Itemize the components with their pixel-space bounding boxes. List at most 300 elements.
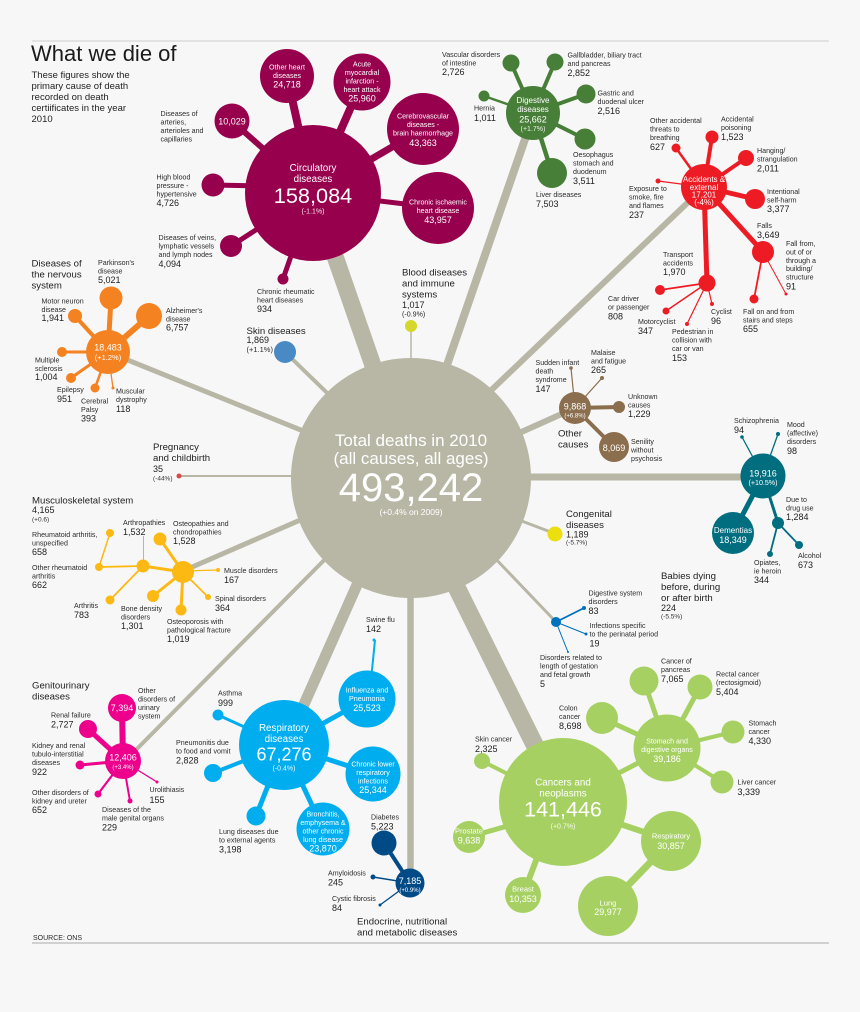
kidney and renal: 922 bbox=[32, 767, 47, 777]
hub: genitourinary total bbox=[105, 743, 141, 779]
skin diseases bbox=[246, 326, 306, 363]
skin diseases: (+1.1%) bbox=[246, 345, 273, 354]
musculoskeletal heading bbox=[32, 496, 133, 524]
blood diseases and immune systems: 1,017 bbox=[402, 300, 425, 310]
hub: respiratory total bbox=[239, 700, 329, 790]
hub: accidents total: (-4%) bbox=[694, 198, 714, 207]
high blood pressure: 4,726 bbox=[156, 198, 179, 208]
skin cancer: 2,325 bbox=[475, 744, 498, 754]
amyloidosis bbox=[328, 870, 410, 888]
acute myocardial infarction: heart attack bbox=[343, 86, 381, 94]
source: SOURCE: ONS bbox=[33, 935, 82, 942]
unknown causes: causes bbox=[628, 402, 651, 410]
transport accidents: accidents bbox=[663, 260, 693, 268]
osteopathies bbox=[154, 520, 229, 572]
pregnancy and childbirth: (-44%) bbox=[153, 476, 173, 482]
diseases of veins: 4,094 bbox=[158, 259, 181, 269]
vascular disorders of intestine: Vascular disorders bbox=[442, 51, 501, 59]
intentional self-harm: 3,377 bbox=[767, 204, 790, 214]
cerebral palsy: Cerebral bbox=[81, 398, 109, 406]
hanging: strangulation bbox=[757, 156, 798, 164]
digestive system disorders: disorders bbox=[588, 598, 618, 606]
stomach and digestive organs: 3,339 bbox=[738, 787, 760, 797]
congenital diseases bbox=[548, 509, 612, 546]
falls: out of or bbox=[786, 248, 813, 256]
muscular dystrophy: dystrophy bbox=[116, 396, 147, 404]
hub: nervous total: 18,483 bbox=[94, 342, 122, 352]
skin diseases: Skin diseases bbox=[246, 326, 306, 337]
prostate cancer: Prostate bbox=[455, 826, 483, 836]
transport accidents: 347 bbox=[638, 326, 653, 336]
intentional self-harm: self-harm bbox=[767, 196, 797, 204]
influenza and pneumonia: Swine flu bbox=[366, 616, 395, 624]
unknown causes bbox=[575, 393, 658, 419]
due to drug use: Due to bbox=[786, 496, 807, 504]
cerebrovascular diseases bbox=[313, 93, 459, 193]
intro text: recorded on death bbox=[32, 92, 109, 103]
arthropathies bbox=[123, 519, 183, 572]
acute myocardial infarction: 25,960 bbox=[348, 94, 376, 104]
stomach and digestive organs: Cancer of bbox=[661, 658, 692, 666]
hub: respiratory total: 67,276 bbox=[256, 744, 312, 764]
renal failure: Renal failure bbox=[51, 712, 91, 720]
vascular disorders of intestine: 2,726 bbox=[442, 67, 465, 77]
gastric ulcer: Gastric and bbox=[598, 90, 634, 98]
bronchitis and emphysema bbox=[284, 745, 350, 856]
accidental poisoning bbox=[704, 116, 754, 187]
hub: respiratory total: Respiratory bbox=[259, 723, 309, 734]
transport accidents: 153 bbox=[672, 353, 687, 363]
oesophagus: 3,511 bbox=[573, 176, 595, 186]
chronic rheumatic heart diseases: Chronic rheumatic bbox=[257, 288, 315, 296]
arthritis bbox=[74, 566, 143, 620]
digestive system disorders bbox=[556, 590, 642, 622]
nervous heading bbox=[32, 258, 82, 292]
spinal disorders: Spinal disorders bbox=[215, 595, 266, 603]
gastric ulcer: 2,516 bbox=[598, 106, 620, 116]
central circle: total deaths: 493,242 bbox=[339, 466, 483, 510]
acute myocardial infarction: Acute bbox=[353, 60, 371, 68]
cluster: mental and behavioural disorders bbox=[712, 417, 822, 585]
other heart diseases: 24,718 bbox=[273, 80, 301, 90]
cluster: respiratory diseases bbox=[176, 616, 400, 856]
hub: other causes total: 9,868 bbox=[564, 402, 586, 412]
due to drug use: 344 bbox=[754, 575, 769, 585]
hub: accidents total: Accidents & bbox=[683, 175, 726, 184]
pregnancy and childbirth: Pregnancy bbox=[153, 442, 199, 453]
other heart diseases: Other heart bbox=[269, 64, 305, 72]
senility: without bbox=[630, 446, 654, 454]
asthma: 999 bbox=[218, 698, 233, 708]
respiratory cancer and lung: 29,977 bbox=[594, 907, 622, 917]
senility: 8,069 bbox=[603, 443, 625, 453]
cerebrovascular diseases: Cerebrovascular bbox=[397, 112, 450, 120]
pregnancy and childbirth bbox=[153, 442, 210, 482]
hub: circulatory total: diseases bbox=[294, 174, 332, 185]
alzheimers: 6,757 bbox=[166, 322, 189, 332]
hub: other causes total: (+6.8%) bbox=[564, 414, 586, 420]
exposure to smoke: 237 bbox=[629, 210, 644, 220]
bone density disorders bbox=[121, 572, 183, 631]
stomach and digestive organs: cancer bbox=[748, 728, 770, 736]
stomach and digestive organs: Stomach and bbox=[646, 738, 688, 746]
malaise and fatigue bbox=[575, 349, 626, 408]
other disorders of urinary system: 7,394 bbox=[111, 703, 133, 713]
hub: endocrine total bbox=[396, 868, 424, 898]
other heart diseases bbox=[260, 49, 314, 193]
parkinsons: disease bbox=[98, 268, 123, 276]
gallbladder: Gallbladder, biliary tract bbox=[568, 52, 642, 60]
kidney and renal: Kidney and renal bbox=[32, 742, 86, 750]
gallbladder: and pancreas bbox=[568, 60, 611, 68]
malaise and fatigue: and fatigue bbox=[591, 358, 626, 366]
muscle disorders bbox=[183, 567, 278, 585]
cluster: endocrine, nutritional and metabolic diseases bbox=[328, 814, 457, 938]
diseases of arteries: arteries, bbox=[160, 118, 186, 126]
schizophrenia: Schizophrenia bbox=[734, 417, 779, 425]
transport accidents: Motorcyclist bbox=[638, 318, 675, 326]
musculoskeletal heading: (+0.6) bbox=[32, 516, 49, 524]
cluster: other causes bbox=[536, 349, 663, 463]
central circle: total deaths bbox=[291, 358, 531, 598]
liver diseases: 7,503 bbox=[536, 199, 559, 209]
pneumonitis: to food and vomit bbox=[176, 748, 230, 756]
congenital diseases: 1,189 bbox=[566, 530, 589, 540]
cerebral palsy: Palsy bbox=[81, 406, 99, 414]
transport accidents: 1,970 bbox=[663, 267, 686, 277]
falls: Falls bbox=[757, 222, 772, 230]
chronic ischaemic heart disease: Chronic ischaemic bbox=[409, 198, 467, 206]
hub: circulatory total: 158,084 bbox=[274, 183, 352, 208]
disorders related to gestation: Disorders related to bbox=[540, 654, 602, 662]
blood diseases and immune systems: and immune bbox=[402, 278, 455, 290]
dementias bbox=[712, 476, 763, 554]
stomach and digestive organs: Stomach bbox=[748, 720, 777, 728]
hub: accidents total: external bbox=[690, 183, 718, 192]
stomach and digestive organs bbox=[559, 658, 777, 802]
sudden infant death syndrome: syndrome bbox=[536, 376, 567, 384]
hub: nervous total: (+1.2%) bbox=[95, 353, 122, 362]
hub: endocrine total: 7,185 bbox=[399, 876, 421, 886]
diseases of veins bbox=[158, 193, 313, 269]
high blood pressure: pressure - bbox=[156, 182, 189, 190]
renal failure: 2,727 bbox=[51, 720, 74, 730]
cystic fibrosis bbox=[332, 883, 410, 913]
hub: nervous total bbox=[86, 330, 130, 374]
hub: mental total: (+10.5%) bbox=[749, 479, 777, 487]
vascular disorders of intestine: of intestine bbox=[442, 60, 476, 68]
chronic lower respiratory: respiratory bbox=[356, 769, 390, 777]
hub: cancers total: (+0.7%) bbox=[551, 824, 575, 830]
vascular disorders of intestine bbox=[442, 51, 533, 113]
urolithiasis bbox=[123, 761, 185, 805]
hub: mental total bbox=[740, 454, 786, 498]
prostate cancer: 9,638 bbox=[458, 836, 480, 846]
other accidental threats to breathing: 627 bbox=[650, 142, 665, 152]
cluster: genitourinary diseases bbox=[32, 680, 185, 832]
skin cancer: Skin cancer bbox=[475, 736, 513, 744]
rheumatoid and other rheumatoid arthritis: arthritis bbox=[32, 572, 56, 580]
influenza and pneumonia: Influenza and bbox=[346, 686, 388, 694]
hub: babies bbox=[551, 617, 561, 627]
hub: endocrine total: (+0.9%) bbox=[399, 888, 421, 894]
hub: respiratory total: (-0.4%) bbox=[273, 766, 295, 772]
respiratory cancer and lung: Lung bbox=[600, 898, 616, 908]
diseases of veins: Diseases of veins, bbox=[158, 234, 216, 242]
babies heading: (-5.5%) bbox=[661, 614, 682, 620]
schizophrenia: 94 bbox=[734, 425, 744, 435]
hanging: Hanging/ bbox=[757, 147, 785, 155]
digestive system disorders: Digestive system bbox=[588, 590, 642, 598]
arthritis: Arthritis bbox=[74, 602, 98, 610]
hub: cancers total bbox=[499, 738, 627, 866]
respiratory cancer and lung bbox=[563, 805, 701, 936]
bone density disorders: Bone density bbox=[121, 605, 162, 613]
mood disorders: (affective) bbox=[787, 430, 818, 438]
high blood pressure: hypertensive bbox=[156, 190, 197, 198]
hernia: Hernia bbox=[474, 104, 495, 112]
stomach and digestive organs: Rectal cancer bbox=[716, 670, 760, 678]
stomach and digestive organs: 7,065 bbox=[661, 674, 684, 684]
other disorders of urinary system: Other bbox=[138, 687, 156, 695]
disorders related to gestation: length of gestation bbox=[540, 662, 598, 670]
falls: structure bbox=[786, 274, 814, 282]
pneumonitis: Pneumonitis due bbox=[176, 739, 229, 747]
due to drug use: 1,284 bbox=[786, 512, 809, 522]
other disorders of urinary system: disorders of bbox=[138, 696, 175, 704]
lung diseases due to external agents bbox=[219, 745, 284, 854]
breast cancer: 10,353 bbox=[509, 894, 537, 904]
diseases of arteries: arterioles and bbox=[160, 127, 204, 135]
rheumatoid and other rheumatoid arthritis: 658 bbox=[32, 547, 47, 557]
bronchitis and emphysema: emphysema & bbox=[300, 819, 346, 827]
senility: psychosis bbox=[631, 455, 663, 463]
parkinsons: 5,021 bbox=[98, 275, 121, 285]
accidental poisoning: 1,523 bbox=[721, 132, 744, 142]
genitourinary heading: Genitourinary bbox=[32, 680, 90, 692]
oesophagus bbox=[533, 113, 614, 186]
infections specific bbox=[556, 622, 658, 648]
alzheimers: Alzheimer's bbox=[166, 307, 203, 315]
chronic rheumatic heart diseases: heart diseases bbox=[257, 296, 304, 304]
other accidental threats to breathing: Other accidental bbox=[650, 117, 702, 125]
chronic ischaemic heart disease: heart disease bbox=[417, 207, 459, 215]
bronchitis and emphysema: other chronic bbox=[302, 828, 344, 836]
falls: 655 bbox=[743, 324, 758, 334]
gallbladder bbox=[533, 52, 642, 113]
falls: through a bbox=[786, 257, 816, 265]
chronic rheumatic heart diseases bbox=[257, 193, 315, 314]
falls: building/ bbox=[786, 265, 812, 273]
cystic fibrosis: 84 bbox=[332, 903, 342, 913]
due to drug use: ie heroin bbox=[754, 568, 781, 576]
urolithiasis: 155 bbox=[150, 795, 165, 805]
kidney and renal: diseases bbox=[32, 759, 60, 767]
cerebral palsy: 393 bbox=[81, 414, 96, 424]
gallbladder: 2,852 bbox=[568, 68, 590, 78]
cluster: babies dying before, during or after birth bbox=[540, 571, 720, 689]
urolithiasis: Urolithiasis bbox=[150, 786, 185, 794]
pneumonitis: 2,828 bbox=[176, 756, 199, 766]
influenza and pneumonia: Pneumonia bbox=[349, 695, 385, 703]
arthropathies: 1,532 bbox=[123, 527, 146, 537]
hub: circulatory total bbox=[245, 125, 381, 261]
disorders related to gestation: and fetal growth bbox=[540, 671, 591, 679]
transport accidents: 96 bbox=[711, 316, 721, 326]
other accidental threats to breathing: breathing bbox=[650, 134, 680, 142]
hub: circulatory total: Circulatory bbox=[290, 163, 337, 174]
cluster: diseases of the nervous system bbox=[32, 258, 203, 424]
transport accidents: Car driver bbox=[608, 295, 640, 303]
amyloidosis: 245 bbox=[328, 878, 343, 888]
cluster: circulatory diseases bbox=[156, 49, 474, 314]
multiple sclerosis bbox=[35, 347, 108, 382]
accidental poisoning: Accidental bbox=[721, 116, 754, 124]
hub: digestive total: Digestive bbox=[517, 96, 550, 105]
osteopathies: 1,528 bbox=[173, 536, 196, 546]
hub: respiratory total: diseases bbox=[265, 734, 303, 745]
cerebrovascular diseases: diseases - bbox=[407, 121, 440, 129]
bronchitis and emphysema: Bronchitis, bbox=[306, 810, 340, 818]
diseases of arteries: capillaries bbox=[160, 136, 192, 144]
cystic fibrosis: Cystic fibrosis bbox=[332, 895, 376, 903]
sudden infant death syndrome: death bbox=[536, 368, 553, 376]
intro text: These figures show the bbox=[32, 70, 130, 81]
muscular dystrophy bbox=[108, 352, 147, 414]
influenza and pneumonia: 25,523 bbox=[353, 703, 381, 713]
muscular dystrophy: Muscular bbox=[116, 388, 145, 396]
hernia bbox=[474, 90, 533, 123]
title: What we die of bbox=[31, 41, 177, 66]
oesophagus: Oesophagus bbox=[573, 151, 614, 159]
babies heading bbox=[661, 571, 720, 620]
stomach and digestive organs: 39,186 bbox=[653, 754, 681, 764]
endocrine heading bbox=[357, 916, 457, 938]
hub: other causes total bbox=[559, 392, 591, 424]
cluster: cancers and neoplasms bbox=[453, 658, 777, 936]
arthritis: 783 bbox=[74, 610, 89, 620]
hub: cancers total: 141,446 bbox=[524, 798, 602, 822]
male genital organs bbox=[102, 761, 164, 832]
stomach and digestive organs: Colon bbox=[559, 704, 578, 712]
lung diseases due to external agents: 3,198 bbox=[219, 844, 242, 854]
infections specific: Infections specific bbox=[590, 622, 646, 630]
falls: Fall from, bbox=[786, 240, 816, 248]
transport accidents bbox=[608, 187, 732, 363]
bronchitis and emphysema: 23,870 bbox=[309, 844, 337, 854]
multiple sclerosis: Multiple bbox=[35, 356, 59, 364]
pregnancy and childbirth: and childbirth bbox=[153, 453, 210, 464]
bone density disorders: disorders bbox=[121, 614, 151, 622]
hub: cancers total: Cancers and bbox=[535, 778, 591, 788]
cluster: accidents and external causes bbox=[608, 116, 816, 363]
parkinsons bbox=[98, 259, 135, 352]
senility bbox=[575, 408, 663, 463]
infections specific: to the perinatal period bbox=[590, 630, 658, 638]
falls: Fall on and from bbox=[743, 308, 794, 316]
diabetes bbox=[371, 814, 410, 883]
due to drug use: drug use bbox=[786, 504, 814, 512]
liver diseases bbox=[533, 113, 582, 209]
mood disorders: 98 bbox=[787, 446, 797, 456]
alzheimers bbox=[108, 303, 203, 352]
muscular dystrophy: 118 bbox=[116, 404, 130, 414]
osteoporosis: pathological fracture bbox=[167, 626, 231, 634]
other disorders of urinary system bbox=[108, 687, 175, 761]
disorders related to gestation: 5 bbox=[540, 679, 545, 689]
hanging: 2,011 bbox=[757, 164, 779, 174]
stomach and digestive organs: digestive organs bbox=[641, 746, 693, 754]
pneumonitis bbox=[176, 739, 284, 782]
male genital organs: Diseases of the bbox=[102, 806, 151, 814]
kidney and renal bbox=[32, 742, 123, 777]
asthma: Asthma bbox=[218, 690, 242, 698]
diseases of veins: and lymph nodes bbox=[158, 251, 213, 259]
parkinsons: Parkinson's bbox=[98, 259, 135, 267]
hub: genitourinary total: (+3.4%) bbox=[112, 765, 134, 771]
other heart diseases: diseases bbox=[273, 72, 301, 80]
pregnancy and childbirth: 35 bbox=[153, 464, 163, 474]
other causes heading bbox=[558, 428, 589, 450]
acute myocardial infarction: infarction - bbox=[345, 78, 379, 86]
babies heading: Babies dying bbox=[661, 571, 716, 582]
diabetes: Diabetes bbox=[371, 814, 399, 822]
nervous heading: system bbox=[32, 280, 62, 292]
multiple sclerosis: 1,004 bbox=[35, 372, 58, 382]
digestive system disorders: 83 bbox=[588, 606, 599, 616]
babies heading: 224 bbox=[661, 603, 676, 613]
cerebrovascular diseases: 43,363 bbox=[409, 138, 437, 148]
diseases of arteries: 10,029 bbox=[218, 116, 246, 126]
rheumatoid and other rheumatoid arthritis: Other rheumatoid bbox=[32, 564, 87, 572]
other accidental threats to breathing bbox=[650, 117, 704, 187]
chronic ischaemic heart disease: 43,957 bbox=[424, 215, 452, 225]
hub: cancers total: neoplasms bbox=[539, 788, 587, 800]
hub: digestive total: (+1.7%) bbox=[521, 126, 545, 133]
influenza and pneumonia bbox=[284, 616, 396, 745]
motor neuron disease: Motor neuron bbox=[42, 298, 84, 306]
liver diseases: Liver diseases bbox=[536, 191, 582, 199]
transport accidents: Cyclist bbox=[711, 308, 732, 316]
other disorders of urinary system: urinary bbox=[138, 704, 160, 712]
falls: 3,649 bbox=[757, 230, 780, 240]
diseases of arteries: Diseases of bbox=[160, 110, 198, 118]
renal failure bbox=[51, 712, 123, 761]
stomach and digestive organs: 4,330 bbox=[748, 736, 771, 746]
due to drug use: Alcohol bbox=[798, 552, 822, 560]
stomach and digestive organs: 8,698 bbox=[559, 721, 582, 731]
falls bbox=[704, 187, 816, 334]
rheumatoid and other rheumatoid arthritis: Rheumatoid arthritis, bbox=[32, 531, 97, 539]
influenza and pneumonia: 142 bbox=[366, 624, 381, 634]
other disorders of kidney bbox=[32, 761, 123, 815]
high blood pressure bbox=[156, 174, 313, 208]
hub: accidents total bbox=[681, 164, 727, 210]
osteoporosis bbox=[167, 572, 231, 644]
motor neuron disease: 1,941 bbox=[42, 313, 64, 323]
diseases of arteries bbox=[160, 104, 313, 193]
skin diseases: 1,869 bbox=[246, 335, 269, 345]
epilepsy bbox=[57, 352, 108, 404]
sudden infant death syndrome: 147 bbox=[536, 384, 551, 394]
rheumatoid and other rheumatoid arthritis: unspecified bbox=[32, 540, 68, 548]
accidental poisoning: poisoning bbox=[721, 124, 751, 132]
motor neuron disease: disease bbox=[42, 306, 66, 314]
lung diseases due to external agents: to external agents bbox=[219, 836, 276, 844]
hub: circulatory total: (-1.1%) bbox=[302, 208, 324, 216]
transport accidents: Transport bbox=[663, 251, 693, 259]
motor neuron disease bbox=[42, 298, 108, 352]
